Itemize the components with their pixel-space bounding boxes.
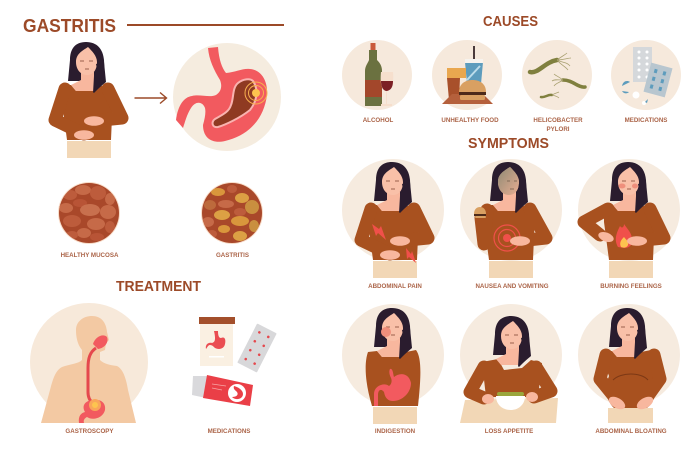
label: unhealthy food: UNHEALTHY FOOD [441,117,499,124]
medicine jar [199,317,235,366]
label: causes medications: MEDICATIONS [625,117,667,124]
label: abdominal pain: ABDOMINAL PAIN [368,283,422,290]
gastritis mucosa circle [201,182,263,244]
label: burning feelings: BURNING FEELINGS [600,283,662,290]
label: nausea and vomiting: NAUSEA AND VOMITING [475,283,549,290]
main woman figure holding stomach [55,42,122,158]
healthy mucosa circle [58,182,120,244]
label: gastroscopy: GASTROSCOPY [65,428,114,435]
label: treatment medications: MEDICATIONS [208,428,250,435]
label: abdominal bloating: ABDOMINAL BLOATING [595,428,667,435]
blister pack [237,323,277,373]
symptom: abdominal bloating [578,304,680,423]
heading: causes: CAUSES [483,13,538,30]
label: helicobacter pylori: PYLORI [546,126,570,133]
symptom: burning feelings [578,159,680,278]
cause: medications [611,40,681,110]
label: gastritis: GASTRITIS [216,252,249,259]
gastroscopy illustration [30,303,148,423]
symptom: abdominal pain [342,159,444,278]
heading: treatment: TREATMENT [116,278,201,295]
symptom: indigestion [342,304,444,424]
treatment medications icons [192,317,277,406]
title: Gastritis: GASTRITIS [23,15,116,36]
symptom: nausea and vomiting [460,159,562,278]
label: helicobacter pylori [533,117,583,133]
symptom: loss appetite [460,304,562,423]
label: helicobacter pylori: HELICOBACTER [533,117,583,124]
cause: helicobacter pylori [522,40,592,110]
stomach illustration [173,43,281,151]
label: alcohol: ALCOHOL [363,117,394,124]
label: healthy mucosa: HEALTHY MUCOSA [61,252,119,259]
label: loss appetite: LOSS APPETITE [485,428,533,435]
heading: symptoms: SYMPTOMS [468,135,549,152]
arrow [134,92,166,104]
cause: alcohol [342,40,412,110]
cause: unhealthy food [432,40,502,110]
label: indigestion: INDIGESTION [375,428,416,435]
red medicine box [192,375,253,406]
